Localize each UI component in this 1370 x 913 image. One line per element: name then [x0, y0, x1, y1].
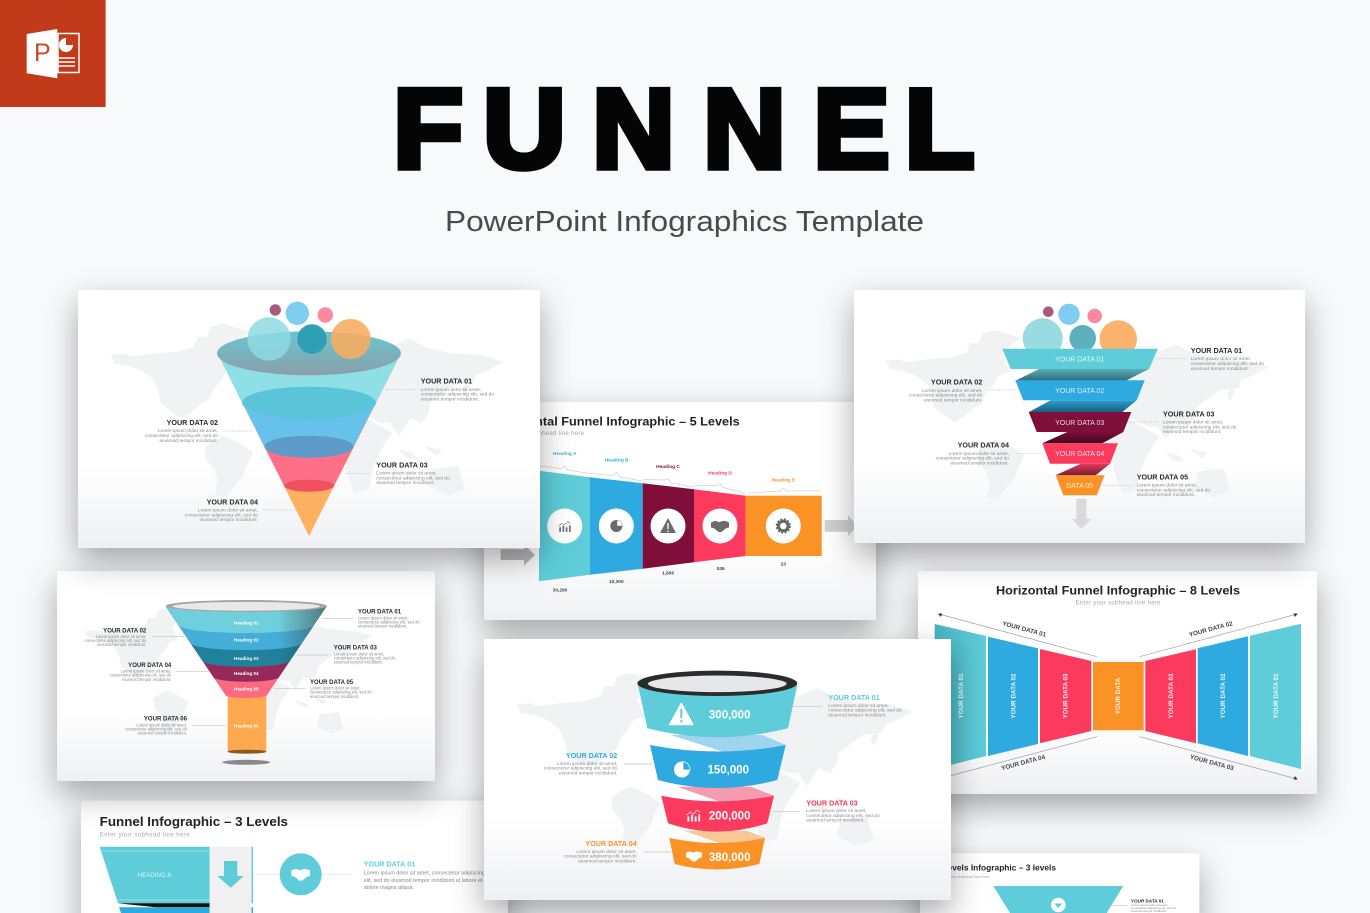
cone funnel [217, 331, 401, 536]
label: your data 02: YOUR DATA 02 [566, 751, 617, 760]
label: your data 03 [1163, 409, 1237, 435]
stacked funnel [637, 671, 797, 870]
label: your data 03: eiusmod tempor incididunt. [806, 818, 865, 824]
segment headings: Heading B [605, 457, 629, 463]
label: your data 03: consectetur adipiscing elit, sed do [806, 813, 880, 819]
icon: pie circle [599, 508, 634, 544]
label: your data 01 [421, 377, 494, 402]
funnel connector [118, 903, 210, 907]
label: your data 01: YOUR DATA 01 [828, 693, 880, 702]
label: your data 04: YOUR DATA 04 [958, 441, 1009, 450]
label: your data 02: YOUR DATA 02 [103, 628, 147, 634]
ribbon funnel: YOUR DATA 02 [1055, 388, 1104, 395]
direction arrows [938, 614, 1297, 779]
label: your data 03: Lorem ipsum dolor sit amet, [1163, 419, 1223, 425]
segment values: 1,566 [662, 570, 674, 576]
arrow: down [1072, 499, 1091, 529]
label: your data 01: Lorem ipsum dolor sit amet, [828, 703, 889, 709]
world map [111, 324, 505, 496]
bow-tie funnel panels: YOUR DATA 02 [1010, 673, 1018, 719]
funnel: Heading 01 [234, 620, 259, 625]
label: your data 01: eiusmod tempor incididunt. [1191, 366, 1249, 372]
stacked funnel: 380,000 [709, 852, 750, 864]
diagonal labels: YOUR DATA 02 [1188, 620, 1234, 639]
label: your data 04: Lorem ipsum dolor sit amet, [949, 451, 1009, 457]
segment values [553, 561, 786, 594]
label: your data 04: consectetur adipiscing elit, sed do [936, 456, 1009, 462]
label: your data 06: Lorem ipsum dolor sit amet, [136, 722, 187, 727]
label: your data 02: Lorem ipsum dolor sit amet, [557, 761, 617, 767]
label: your data 03: Lorem ipsum dolor sit amet, [806, 808, 867, 814]
label: your data 01: YOUR DATA 01 [1191, 346, 1242, 355]
label: your data 03: YOUR DATA 03 [376, 460, 428, 469]
label: your data 05: consectetur adipiscing elit, sed do [1137, 487, 1210, 493]
heading: Horizontal Funnel Infographic – 5 Levels [496, 414, 740, 428]
bow-tie funnel panels: YOUR DATA 02 [1220, 673, 1227, 719]
ribbon funnel: YOUR DATA 03 [1055, 420, 1104, 427]
stacked funnel: 300,000 [709, 710, 750, 722]
label: your data 01: Lorem ipsum dolor sit amet, [421, 387, 481, 393]
label: your data 02: consectetur adipiscing elit, sed do [145, 433, 218, 439]
segment values: 536 [717, 566, 725, 572]
label: your data 05: consectetur adipiscing elit, sed do [310, 690, 372, 695]
label: your data 05 [310, 680, 372, 699]
ribbon funnel [1002, 349, 1158, 495]
label: your data 04: consectetur adipiscing elit, sed do [563, 854, 637, 860]
label: your data 05: Lorem ipsum dolor sit amet, [310, 686, 361, 691]
label: your data 04: Lorem ipsum dolor sit amet, [576, 849, 637, 855]
label: your data 02 [145, 418, 218, 444]
subheading: Enter your subhead line here [938, 874, 990, 879]
diagonal labels: YOUR DATA 03 [1189, 754, 1235, 772]
label: your data 03: YOUR DATA 03 [334, 646, 377, 652]
label: your data 02: Lorem ipsum dolor sit amet, [922, 388, 982, 394]
label: your data 04: Lorem ipsum dolor sit amet, [121, 669, 171, 674]
funnel: Heading 05 [234, 687, 259, 692]
world map [85, 608, 373, 734]
icon: warning [670, 704, 693, 724]
icon: chart [687, 810, 700, 822]
label: your data 01: YOUR DATA 01 [1131, 898, 1164, 903]
panel: cone funnel 4 levels [78, 290, 540, 548]
bow-tie funnel panels: YOUR DATA 01 [1273, 673, 1280, 719]
label: your data 03: eiusmod tempor incididunt. [1163, 429, 1221, 435]
text: your data 01 [364, 860, 485, 891]
panel: funnel levels 3 levels (bottom right, partly hidden) [913, 853, 1199, 913]
label: your data 06: YOUR DATA 06 [144, 717, 188, 723]
label: your data 01: consectetur adipiscing elit, sed do [1131, 906, 1176, 910]
label: your data 01 [358, 610, 420, 628]
down arrow panel [210, 847, 251, 913]
label: your data 05: YOUR DATA 05 [310, 680, 354, 686]
heading: Funnel Infographic – 3 Levels [100, 815, 288, 829]
subtitle: PowerPoint Infographics Template [445, 206, 924, 238]
panel: funnel 6 levels [57, 571, 435, 781]
ribbon funnel: YOUR DATA 04 [1055, 451, 1104, 458]
text: your data 01: Lorem ipsum dolor sit amet, consectetur adipiscing [364, 870, 485, 876]
label: your data 04 [110, 663, 172, 682]
funnel top [993, 886, 1123, 913]
label: your data 05 [1137, 472, 1210, 498]
label: your data 05: Lorem ipsum dolor sit amet, [1137, 482, 1197, 488]
label: your data 01: YOUR DATA 01 [421, 377, 472, 386]
world map [517, 673, 914, 846]
panel: stacked funnel 4 levels [484, 639, 951, 900]
label: your data 03: YOUR DATA 03 [1163, 409, 1214, 418]
label: your data 02: eiusmod tempor incididunt. [924, 398, 982, 404]
heading: Funnel Levels Infographic – 3 levels [913, 863, 1056, 873]
icon: chart circle [547, 508, 582, 544]
heading: Horizontal Funnel Infographic – 8 Levels [996, 583, 1240, 597]
label: your data 04 [185, 497, 258, 523]
label: your data 01: consectetur adipiscing elit, sed do [1191, 361, 1264, 367]
funnel [166, 600, 327, 754]
icon: handshake [686, 851, 702, 861]
label: your data 01: Lorem ipsum dolor sit amet, [1131, 903, 1168, 907]
label: your data 04: eiusmod tempor incididunt. [200, 517, 258, 523]
bow-tie funnel panels [935, 624, 1301, 769]
text: your data 01: elit, sed do eiusmod tempor incididunt ut labore et [364, 878, 483, 884]
label: your data 01: eiusmod tempor incididunt. [828, 712, 887, 718]
label: your data 03 [334, 646, 396, 664]
icon: handshake circle [280, 853, 322, 895]
panel: horizontal funnel 8 levels [918, 571, 1317, 794]
label: your data 01 [1191, 346, 1264, 372]
panel: horizontal funnel 5 levels [484, 402, 876, 620]
label: your data 03: eiusmod tempor incididunt. [376, 480, 435, 486]
ribbon funnel: DATA 05 [1066, 483, 1093, 490]
label: your data 03 [376, 460, 450, 486]
label: your data 02: consectetur adipiscing elit, sed do [544, 766, 618, 772]
title: FUNNEL [393, 67, 975, 191]
label: your data 02 [85, 628, 147, 647]
label: your data 04: eiusmod tempor incididunt. [122, 677, 171, 682]
label: your data 03: Lorem ipsum dolor sit amet, [334, 651, 384, 656]
segment headings: Heading A [553, 451, 577, 457]
label: your data 03: eiusmod tempor incididunt. [334, 659, 383, 664]
label: your data 03: consectetur adipiscing elit, sed do [1163, 424, 1237, 430]
label: your data 02: consectetur adipiscing elit, sed do [909, 393, 983, 399]
bow-tie funnel panels: YOUR DATA 03 [1062, 673, 1070, 719]
funnel segments [539, 471, 822, 581]
segment values: 30,290 [553, 588, 568, 594]
panel: funnel infographic 3 levels (bottom left) [81, 801, 508, 913]
label: your data 01: consectetur adipiscing elit, sed do [828, 708, 902, 714]
subheading: Enter your subhead line here [499, 431, 585, 437]
icon: gear circle [766, 508, 801, 544]
label: your data 03: consectetur adipiscing elit, sed do [334, 655, 396, 660]
label: your data 03: consectetur adipiscing elit, sed do [376, 475, 450, 481]
powerpoint badge [0, 0, 106, 107]
brace lines [540, 466, 820, 494]
label: your data 01: YOUR DATA 01 [358, 610, 402, 616]
icon: handshake circle [702, 508, 738, 544]
icon: warning circle [650, 508, 686, 544]
label: your data 01: Lorem ipsum dolor sit amet, [1191, 356, 1251, 362]
stacked funnel: 150,000 [708, 764, 749, 776]
stacked funnel: 200,000 [709, 810, 750, 822]
segment headings [553, 451, 796, 483]
label: your data 01: eiusmod tempor incididunt. [1131, 909, 1167, 913]
funnel level a: HEADING A [138, 872, 172, 879]
label: your data 02: Lorem ipsum dolor sit amet, [158, 428, 218, 434]
label: your data 04: consectetur adipiscing elit, sed do [110, 673, 172, 678]
label: your data 02: eiusmod tempor incididunt. [160, 438, 218, 444]
funnel: Heading 06 [234, 723, 259, 728]
label: your data 02: Lorem ipsum dolor sit amet, [96, 634, 146, 639]
label: your data 02: eiusmod tempor incididunt. [559, 770, 617, 776]
panel: ribbon funnel 5 levels [854, 290, 1305, 543]
label: your data 05: YOUR DATA 05 [1137, 472, 1188, 481]
floating balls [1023, 304, 1137, 358]
segment headings: Heading E [772, 477, 796, 483]
label: your data 04: eiusmod tempor incididunt. [578, 858, 637, 864]
funnel: Heading 03 [234, 656, 259, 661]
segment headings: Heading C [656, 464, 680, 470]
segment headings: Heading D [708, 471, 732, 477]
bow-tie funnel panels: YOUR DATA [1115, 677, 1122, 714]
icon: pie [674, 762, 690, 778]
funnel: Heading 02 [234, 638, 259, 643]
label: your data 02: YOUR DATA 02 [167, 418, 218, 427]
label: your data 05: eiusmod tempor incididunt. [310, 694, 359, 699]
label: your data 02: YOUR DATA 02 [931, 378, 982, 387]
text: your data 01: YOUR DATA 01 [364, 860, 415, 869]
diagonal labels [1001, 620, 1235, 772]
icon: powerpoint logo: P [34, 39, 51, 67]
label: your data 01 [1131, 898, 1176, 913]
label: your data 01: Lorem ipsum dolor sit amet, [358, 615, 409, 620]
funnel shadow [222, 760, 270, 765]
bow-tie funnel panels: YOUR DATA 01 [958, 673, 965, 719]
label: your data 06: consectetur adipiscing elit, sed do [125, 726, 188, 731]
label: your data 06 [125, 717, 188, 735]
funnel: Heading 04 [234, 671, 259, 676]
label: your data 04 [563, 839, 637, 864]
world map [886, 330, 1269, 497]
diagonal labels: YOUR DATA 01 [1001, 620, 1047, 639]
floating balls [247, 302, 371, 361]
label: your data 03: YOUR DATA 03 [806, 798, 858, 807]
label: your data 02 [909, 378, 983, 404]
label: your data 04: YOUR DATA 04 [128, 663, 172, 669]
label: your data 01: eiusmod tempor incididunt. [358, 623, 407, 628]
label: your data 04: eiusmod tempor incididunt. [951, 461, 1009, 467]
label: your data 01: eiusmod tempor incididunt. [421, 397, 479, 403]
label: your data 03: Lorem ipsum dolor sit amet, [376, 470, 437, 476]
label: your data 02 [544, 751, 618, 776]
arrow: left [501, 544, 535, 566]
subheading: Enter your subhead line here [1076, 600, 1161, 606]
label: your data 02: consectetur adipiscing elit, sed do [85, 638, 147, 643]
label: your data 04: YOUR DATA 04 [207, 497, 258, 506]
segment values: 10,300 [609, 579, 624, 585]
funnel level a [100, 847, 210, 903]
label: your data 06: eiusmod tempor incididunt. [138, 730, 187, 735]
bow-tie funnel panels: YOUR DATA 03 [1168, 673, 1175, 719]
label: your data 04: consectetur adipiscing elit, sed do [185, 512, 258, 518]
label: your data 05: eiusmod tempor incididunt. [1137, 492, 1195, 498]
label: your data 04: Lorem ipsum dolor sit amet, [198, 507, 258, 513]
funnel level b [119, 907, 210, 913]
label: your data 01: consectetur adipiscing elit, sed do [421, 392, 494, 398]
arrow: right [825, 515, 857, 536]
ribbon funnel: YOUR DATA 01 [1055, 356, 1104, 364]
label: your data 03 [806, 798, 880, 824]
icon: heart circle [1051, 898, 1066, 912]
text: your data 01: dolore magna aliqua. [364, 885, 414, 891]
segment values: 23 [781, 561, 786, 567]
diagonal labels: YOUR DATA 04 [1001, 754, 1046, 772]
label: your data 04 [936, 441, 1009, 466]
label: your data 01: consectetur adipiscing elit, sed do [358, 619, 420, 624]
subheading: Enter your subhead line here [100, 833, 190, 839]
label: your data 04: YOUR DATA 04 [585, 839, 637, 848]
label: your data 01 [828, 693, 902, 718]
label: your data 02: eiusmod tempor incididunt. [97, 642, 146, 647]
